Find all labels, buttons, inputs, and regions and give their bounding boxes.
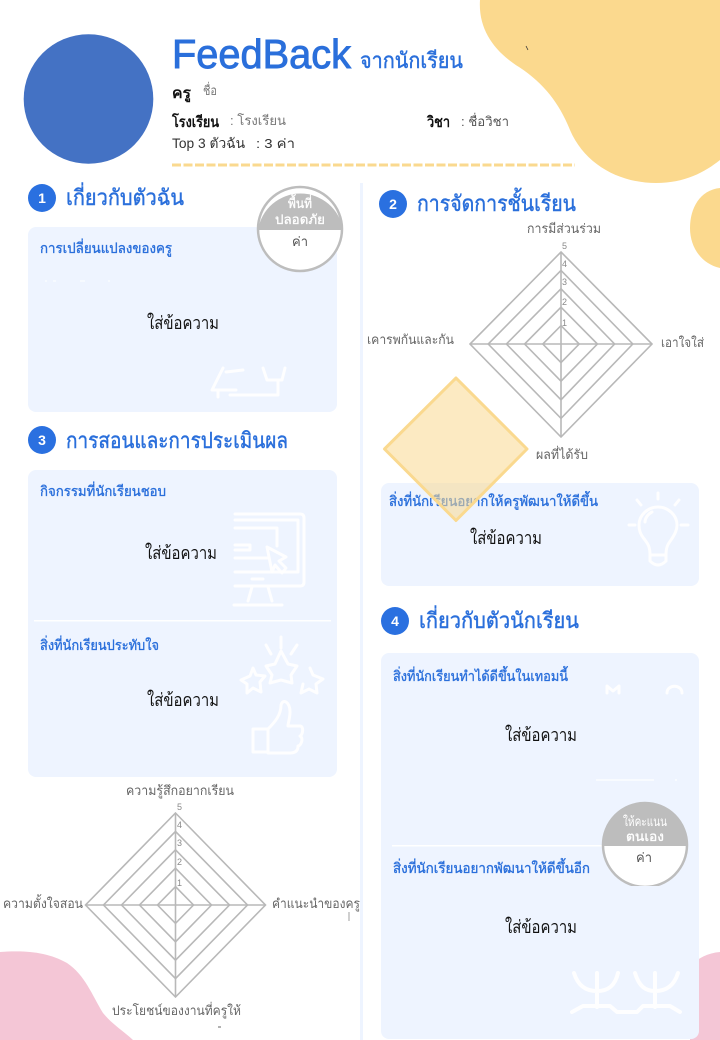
radar chart: bottom left: คำแนะนำของครู — [272, 896, 360, 912]
icon: fragment — [572, 973, 680, 1012]
radar chart: bottom left: 4 — [177, 820, 182, 830]
body text: ใส่ข้อความ — [505, 724, 577, 745]
top 3: : 3 ค่า — [256, 136, 295, 151]
radar chart: bottom left: 1 — [177, 878, 182, 888]
label: สิ่งที่นักเรียนประทับใจ — [40, 636, 159, 653]
section 3 heading: การสอนและการประเมินผล — [66, 428, 288, 453]
section 1 heading — [28, 182, 184, 212]
body text: ใส่ข้อความ — [470, 527, 542, 548]
section 3 heading: 3 — [38, 432, 46, 448]
header — [171, 31, 509, 151]
section 3 heading — [28, 426, 288, 454]
panel: want teacher to improve — [381, 483, 699, 586]
body text: ใส่ข้อความ — [505, 916, 577, 937]
panel: teacher change — [28, 227, 337, 412]
badge: safe area: ปลอดภัย — [275, 212, 325, 227]
top 3: Top 3 ตัวฉัน — [172, 135, 245, 151]
section 2 heading: การจัดการชั้นเรียน — [417, 188, 576, 216]
column divider — [360, 183, 363, 1040]
badge: safe area: พื้นที่ — [288, 194, 312, 211]
divider — [392, 845, 602, 846]
radar chart: top right: 2 — [562, 297, 567, 307]
title — [172, 31, 463, 77]
section 1 heading: 1 — [38, 190, 46, 206]
teacher: ครู — [172, 85, 192, 103]
teacher: ชื่อ — [203, 82, 217, 98]
radar chart: top right: 3 — [562, 277, 567, 287]
diamond overlay — [384, 378, 527, 520]
panel: about student — [381, 653, 699, 1039]
blob: top right yellow — [480, 0, 720, 183]
profile circle — [24, 34, 153, 164]
body text: ใส่ข้อความ — [147, 689, 219, 710]
blob: bottom left pink — [0, 951, 133, 1040]
section 4 heading: เกี่ยวกับตัวนักเรียน — [419, 605, 579, 633]
label: สิ่งที่นักเรียนอยากให้ครูพัฒนาให้ดีขึ้น — [389, 491, 598, 510]
radar chart: bottom left: 2 — [177, 857, 182, 867]
icon fragments — [607, 686, 682, 693]
radar chart: bottom left: 3 — [177, 838, 182, 848]
radar chart: bottom left — [3, 783, 360, 1027]
badge: safe area — [258, 187, 343, 271]
title: FeedBack — [172, 31, 351, 77]
section 4 heading: 4 — [391, 613, 399, 629]
icon: thumb up — [253, 701, 303, 753]
label: สิ่งที่นักเรียนทำได้ดีขึ้นในเทอมนี้ — [393, 666, 568, 684]
radar chart: top right: ผลที่ได้รับ — [536, 446, 588, 462]
icon: computer — [234, 514, 304, 605]
school — [171, 112, 286, 131]
label: กิจกรรมที่นักเรียนชอบ — [40, 482, 166, 499]
radar chart: top right: 1 — [562, 318, 567, 328]
panel: teaching — [28, 470, 337, 777]
icon: cursor — [267, 547, 286, 573]
school: โรงเรียน — [171, 112, 220, 131]
title: จากนักเรียน — [360, 48, 463, 73]
label: การเปลี่ยนแปลงของครู — [40, 239, 172, 257]
section 2 heading — [379, 188, 576, 218]
school: : โรงเรียน — [230, 113, 286, 128]
icon: light bulb — [629, 493, 688, 565]
radar chart: top right: การมีส่วนร่วม — [527, 221, 601, 236]
blob: right yellow — [690, 188, 720, 268]
dashed rule — [172, 164, 575, 166]
icon: fragment — [212, 368, 285, 397]
label: สิ่งที่นักเรียนอยากพัฒนาให้ดีขึ้นอีก — [393, 858, 590, 876]
badge: safe area: ค่า — [292, 234, 308, 249]
radar chart: top right: 4 — [562, 259, 567, 269]
section 1 heading: เกี่ยวกับตัวฉัน — [66, 182, 184, 210]
tick mark — [526, 46, 528, 50]
badge: self score: ตนเอง — [626, 829, 664, 844]
radar chart: top right: เคารพกันและกัน — [367, 332, 454, 347]
teacher — [172, 82, 217, 103]
radar chart: bottom left: ความรู้สึกอยากเรียน — [126, 783, 234, 799]
badge: self score: ค่า — [636, 850, 652, 865]
blob: bottom right pink — [690, 952, 720, 1040]
radar chart: bottom left: ความตั้งใจสอน — [3, 894, 83, 911]
subject — [427, 113, 509, 131]
subject: วิชา — [427, 113, 450, 131]
radar chart: bottom left: ประโยชน์ของงานที่ครูให้ — [112, 1002, 241, 1019]
section 2 heading: 2 — [389, 196, 397, 212]
radar chart: top right: 5 — [562, 241, 567, 251]
body text: ใส่ข้อความ — [147, 312, 219, 333]
speckles — [45, 280, 110, 282]
divider — [34, 620, 331, 622]
badge: self score: ให้คะแนน — [623, 814, 667, 829]
radar chart: top right: เอาใจใส่ — [661, 335, 704, 350]
badge: self score — [602, 803, 688, 887]
subject: : ชื่อวิชา — [461, 113, 509, 129]
body text: ใส่ข้อความ — [145, 542, 217, 563]
radar chart: top right — [367, 221, 704, 462]
top 3 — [172, 135, 295, 151]
section 4 heading — [381, 605, 579, 635]
radar chart: bottom left: 5 — [177, 802, 182, 812]
icon: stars — [241, 637, 323, 693]
